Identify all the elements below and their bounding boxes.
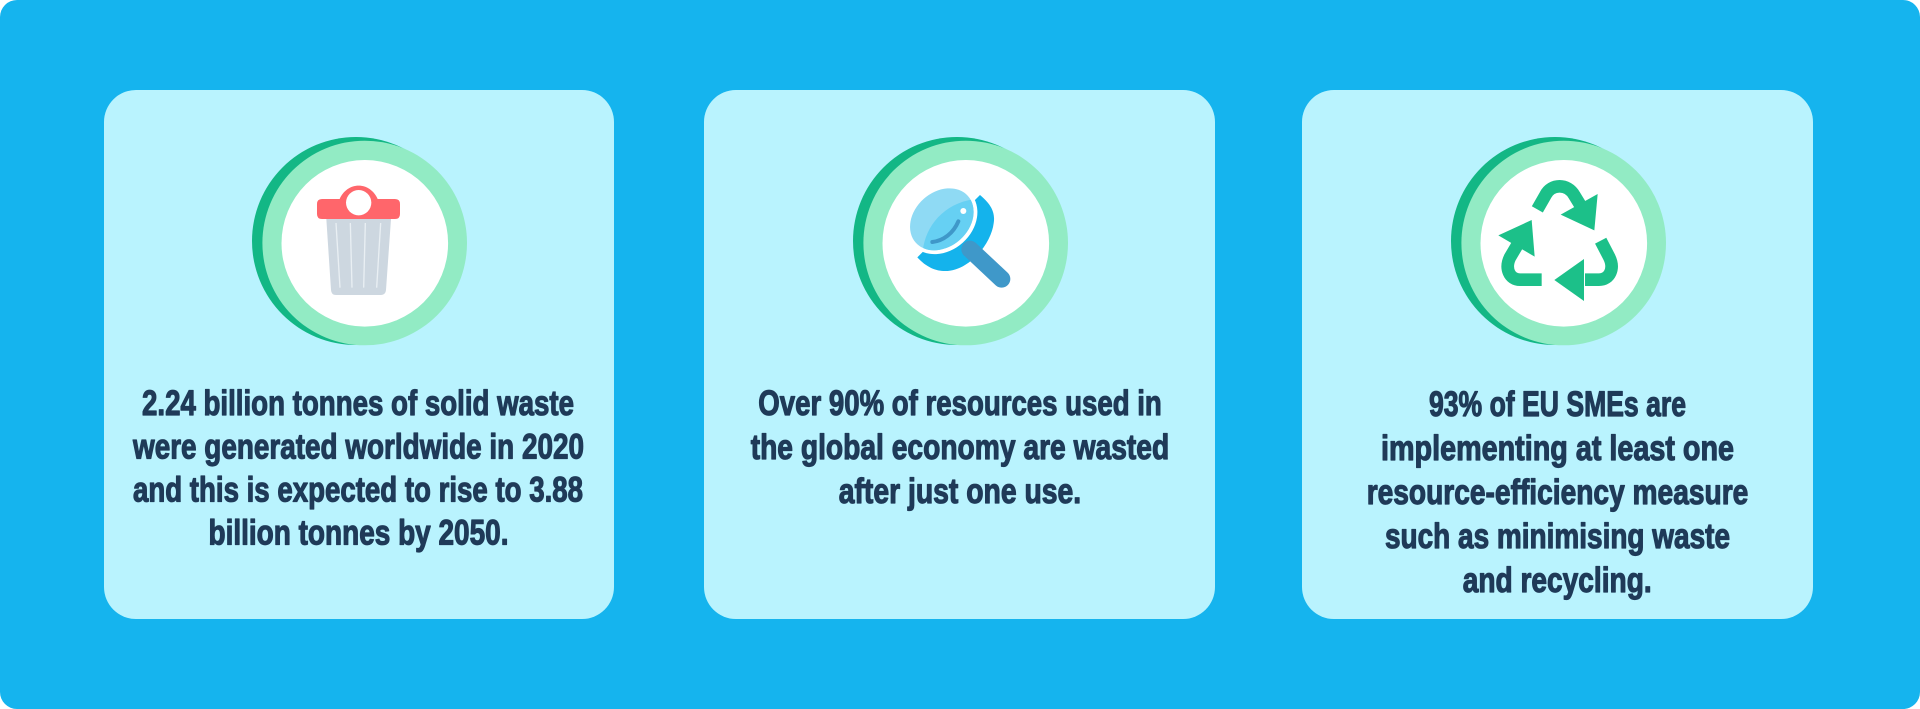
text: wasted resources statistic: the global economy are wasted xyxy=(751,428,1169,467)
icon: rubbish bin xyxy=(252,137,467,345)
text: solid waste statistic: billion tonnes by 2050. xyxy=(208,514,508,552)
text: EU SMEs statistic: resource-efficiency measure xyxy=(1367,473,1748,512)
text: solid waste statistic: were generated worldwide in 2020 xyxy=(132,428,584,466)
text: EU SMEs statistic xyxy=(1367,385,1748,600)
text: wasted resources statistic: Over 90% of resources used in xyxy=(758,384,1162,423)
panel: EU SMEs xyxy=(1302,90,1813,619)
text: wasted resources statistic xyxy=(751,384,1169,511)
card background xyxy=(1302,90,1813,619)
icon: magnifying glass xyxy=(853,137,1068,345)
text: EU SMEs statistic: implementing at least one xyxy=(1381,429,1734,468)
icon: recycling arrows xyxy=(1451,137,1666,345)
text: solid waste statistic: and this is expected to rise to 3.88 xyxy=(133,470,583,510)
text: solid waste statistic: 2.24 billion tonnes of solid waste xyxy=(142,384,574,423)
text: wasted resources statistic: after just one use. xyxy=(839,472,1081,511)
panel: wasted resources xyxy=(704,90,1215,619)
card background xyxy=(104,90,614,619)
text: EU SMEs statistic: 93% of EU SMEs are xyxy=(1429,385,1686,424)
text: EU SMEs statistic: and recycling. xyxy=(1463,561,1652,600)
text: EU SMEs statistic: such as minimising waste xyxy=(1385,517,1730,556)
text: solid waste statistic xyxy=(132,384,584,552)
panel: solid waste xyxy=(104,90,614,619)
card background xyxy=(704,90,1215,619)
